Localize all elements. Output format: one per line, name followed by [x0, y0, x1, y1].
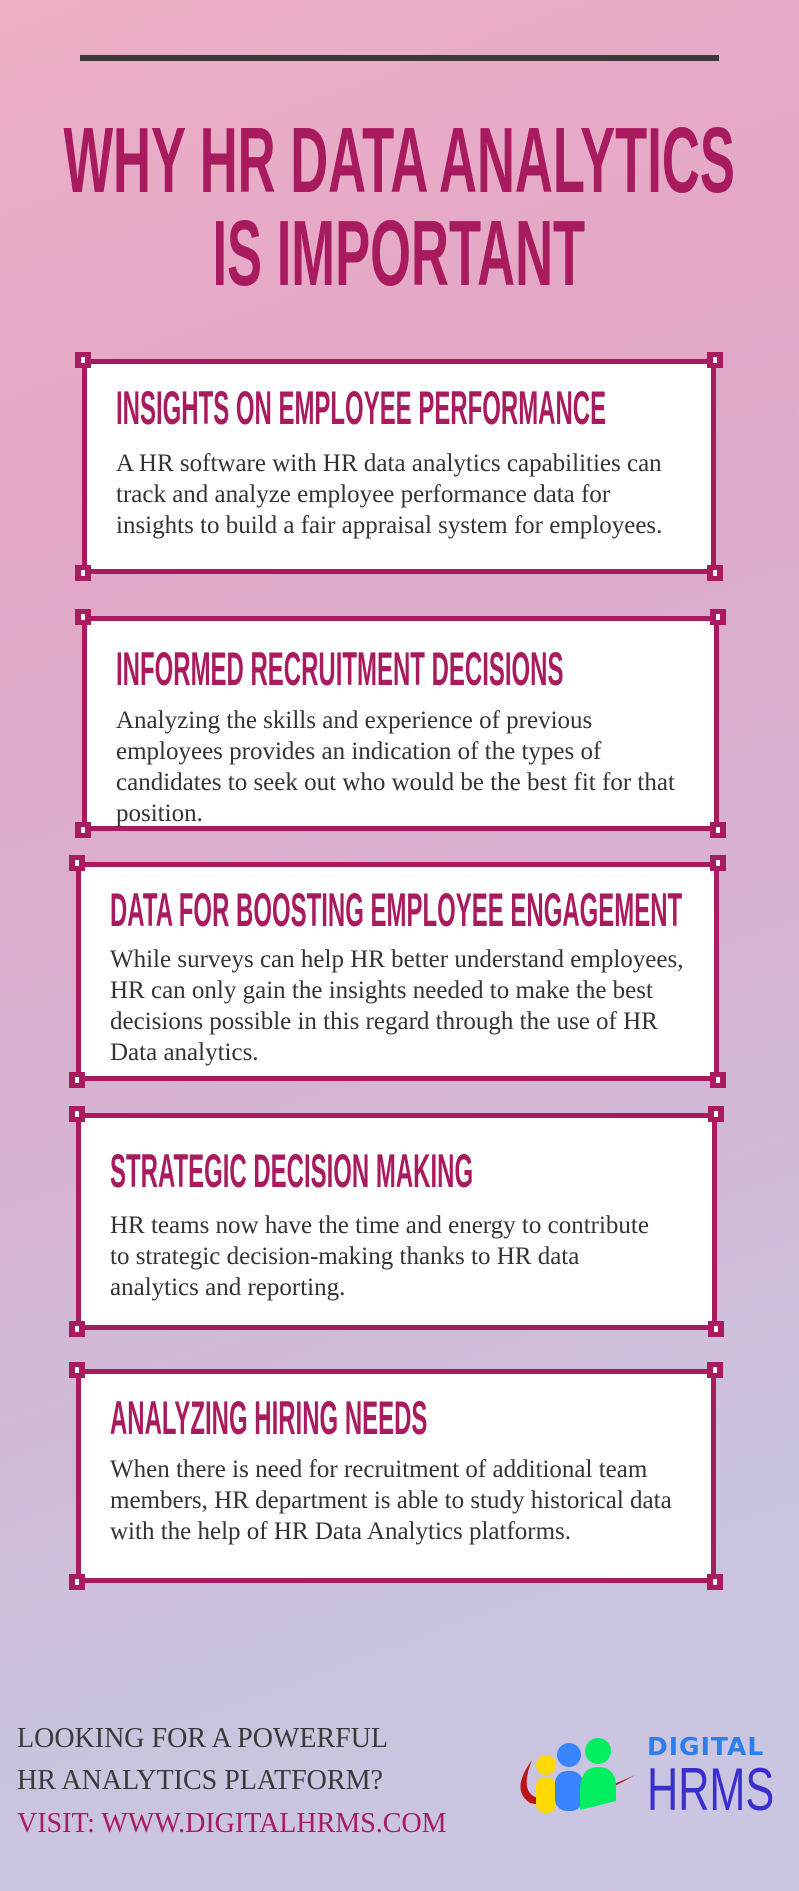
text block: [116, 450, 662, 539]
text block: track and analyze employee performance data for: [116, 481, 610, 508]
text block: members, HR department is able to study historical data: [110, 1487, 672, 1514]
icon: people: [520, 1738, 635, 1813]
text block: A HR software with HR data analytics capabilities can: [116, 450, 662, 477]
panel: insights on employee performance: [82, 359, 716, 574]
panel: informed recruitment decisions: [82, 616, 719, 831]
heading: INFORMED RECRUITMENT DECISIONS: [116, 642, 563, 695]
logo text: DIGITAL: [647, 1732, 764, 1761]
panel: strategic decision making: [76, 1113, 717, 1330]
text block: with the help of HR Data Analytics platforms.: [110, 1518, 571, 1545]
text block: While surveys can help HR better understand employees,: [110, 946, 683, 973]
title: [63, 108, 735, 305]
text block: position.: [116, 800, 203, 827]
text block: [110, 946, 683, 1066]
heading: ANALYZING HIRING NEEDS: [110, 1391, 427, 1444]
footer visit link: VISIT: WWW.DIGITALHRMS.COM: [17, 1808, 447, 1839]
text block: employees provides an indication of the types of: [116, 738, 601, 765]
logo: HRMS: [647, 1756, 774, 1823]
footer question: LOOKING FOR A POWERFUL: [17, 1723, 388, 1754]
text block: analytics and reporting.: [110, 1274, 345, 1301]
text block: decisions possible in this regard through the use of HR: [110, 1008, 658, 1035]
panel: analyzing hiring needs: [76, 1369, 716, 1583]
logo: [520, 1732, 774, 1823]
text block: [110, 1456, 672, 1545]
footer question: [17, 1723, 388, 1796]
text block: Analyzing the skills and experience of previous: [116, 707, 592, 734]
text block: Data analytics.: [110, 1039, 259, 1066]
heading: DATA FOR BOOSTING EMPLOYEE ENGAGEMENT: [110, 883, 682, 936]
text block: [116, 707, 675, 827]
text block: When there is need for recruitment of additional team: [110, 1456, 647, 1483]
footer question: HR ANALYTICS PLATFORM?: [17, 1765, 383, 1796]
text block: candidates to seek out who would be the best fit for that: [116, 769, 675, 796]
title: IS IMPORTANT: [213, 201, 585, 305]
text block: insights to build a fair appraisal system for employees.: [116, 512, 662, 539]
text block: HR can only gain the insights needed to make the best: [110, 977, 653, 1004]
text block: HR teams now have the time and energy to contribute: [110, 1212, 649, 1239]
text block: [110, 1212, 649, 1301]
heading: STRATEGIC DECISION MAKING: [110, 1144, 473, 1197]
text block: to strategic decision-making thanks to HR data: [110, 1243, 579, 1270]
panel: data for boosting employee engagement: [76, 862, 719, 1081]
heading: INSIGHTS ON EMPLOYEE PERFORMANCE: [116, 381, 606, 434]
title: WHY HR DATA ANALYTICS: [63, 108, 735, 212]
